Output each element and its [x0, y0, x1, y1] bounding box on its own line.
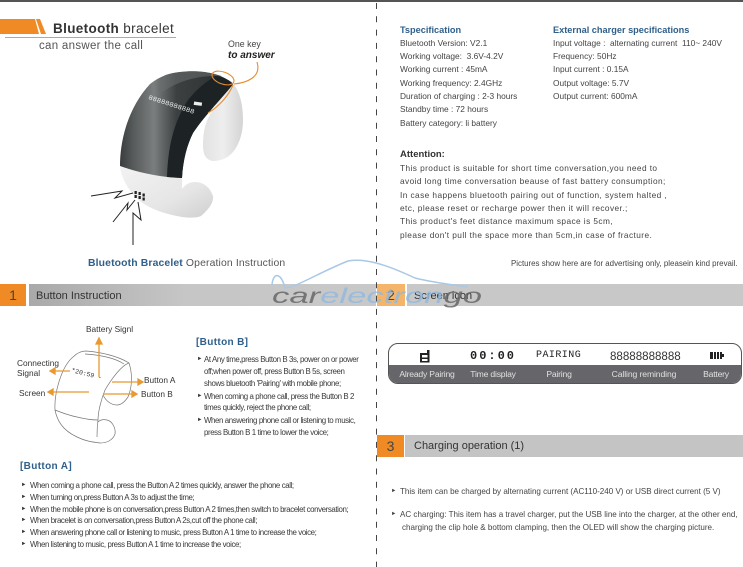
bar title: Screen icon	[414, 290, 472, 302]
heading underline	[5, 37, 176, 38]
label: battery sign: Battery Signl	[86, 324, 133, 334]
charging instructions: AC charging: This item has a travel charger, put the USB line into the charger, at the other end,	[400, 510, 738, 519]
attention heading: Attention:	[400, 149, 445, 160]
label: screen: Screen	[19, 388, 45, 398]
bar	[29, 284, 376, 306]
speaker dots	[134, 191, 145, 200]
calling digits: 88888888888	[610, 350, 681, 363]
number 1	[0, 284, 26, 306]
charger lines: Input voltage : alternating current 110~ 240V	[553, 38, 722, 48]
section bar 3	[377, 435, 743, 457]
callout: one key to answer: to answer	[228, 50, 275, 61]
button b instructions: shows bluetooth 'Pairing' with mobile phone;	[204, 379, 341, 388]
label: connecting signal: Connecting	[17, 358, 59, 368]
illustration: bracelet	[90, 62, 258, 245]
top rule	[0, 0, 743, 2]
rear band	[203, 81, 243, 161]
bar title: Charging operation (1)	[414, 440, 524, 452]
specification panel: Working voltage: 3.6V-4.2V	[400, 51, 503, 61]
button b instructions: ►	[197, 417, 202, 423]
button a instructions	[20, 461, 348, 549]
bracelet outline	[55, 351, 132, 443]
lower white band	[120, 167, 213, 218]
screen icon strip: Battery	[703, 369, 729, 379]
button b instructions: At Any time,press Button B 3s, power on or power	[204, 355, 358, 364]
button b instructions: When coming a phone call, press the Button B 2	[204, 392, 354, 401]
button b heading: [Button B]	[196, 337, 248, 348]
button a instructions: When coming a phone call, press the Button A 2 times quickly, answer the phone call;	[30, 481, 294, 490]
charging line 3: charging the clip hole & bottom clamping, then the OLED will show the charging picture.	[402, 523, 714, 532]
watermark	[271, 260, 483, 308]
watermark text: car electron go	[272, 285, 483, 308]
orange arrows	[48, 338, 143, 397]
specification panel: Battery category: li battery	[400, 118, 497, 128]
bar	[407, 284, 743, 306]
attention block: please don't pull the space more than 5cm,in case of fracture.	[400, 230, 652, 240]
orange tab	[0, 19, 46, 34]
button b instructions: press Button B 1 time to lower the voice;	[204, 428, 328, 437]
spec lines: Bluetooth Version: V2.1	[400, 38, 487, 48]
button a instructions: ►	[21, 529, 26, 535]
button b instructions: ►	[197, 393, 202, 399]
specification panel	[400, 25, 517, 128]
screen icon strip: Pairing	[546, 369, 572, 379]
number 3	[377, 435, 404, 457]
specification panel: Duration of charging : 2-3 hours	[400, 91, 517, 101]
attention text: This product is suitable for short time conversation,you need to	[400, 163, 657, 173]
button b instructions: When answering phone call or listening to music,	[204, 416, 355, 425]
strip labels: Already Pairing	[399, 369, 455, 379]
icon: battery	[710, 352, 724, 359]
heading text: Bluetooth bracelet	[53, 21, 174, 36]
subheading: can answer the call	[39, 40, 143, 52]
attention block: avoid long time conversation beause of fast battery consumption;	[400, 176, 666, 186]
button a instructions: ►	[21, 506, 26, 512]
icon: paired phone	[420, 350, 430, 362]
specification panel: Standby time : 72 hours	[400, 104, 488, 114]
external charger panel: Output voltage: 5.7V	[553, 78, 629, 88]
section bar 2	[377, 284, 743, 306]
charging instructions	[391, 487, 738, 532]
charger heading: External charger specifications	[553, 25, 689, 35]
button b instructions	[196, 337, 359, 437]
button b instructions: off;when power off, press Button B 5s, screen	[204, 367, 344, 376]
number 2	[377, 284, 405, 306]
button a instructions: When bracelet is on conversation,press Button A 2s,cut off the phone call;	[30, 516, 257, 525]
button a instructions: ►	[21, 541, 26, 547]
advertising note: Pictures show here are for advertising only, pleasein kind prevail.	[511, 259, 738, 268]
label: button a: Button A	[144, 375, 175, 385]
screen digits: *20:59 -	[71, 367, 103, 381]
button a list: ►	[21, 482, 26, 488]
sound zigzags	[91, 191, 141, 245]
bar title: Button Instruction	[36, 290, 122, 302]
button a instructions: When the mobile phone is on conversation,press Button A 2 times,then switch to bracelet conversation;	[30, 505, 348, 514]
top gloss	[158, 71, 222, 94]
watermark swoosh	[272, 260, 468, 288]
battery glyph	[194, 101, 202, 106]
screen icon strip: Time display	[470, 369, 516, 379]
external charger panel: Frequency: 50Hz	[553, 51, 617, 61]
button b instructions: times quickly, reject the phone call;	[204, 403, 311, 412]
number 2: 2	[387, 287, 395, 303]
charging instructions: This item can be charged by alternating current (AC110-240 V) or USB direct current (5 V)	[400, 487, 721, 496]
button a instructions: When answering phone call or listening to music, press Button A 1 time to increase the voice;	[30, 528, 316, 537]
callout: one key to answer	[228, 39, 276, 61]
charging line 2: ►	[391, 511, 396, 517]
attention block: In case happens bluetooth pairing out of function, system halted ,	[400, 190, 667, 200]
label: connecting signal: Signal	[17, 368, 40, 378]
orange callout ring and leader	[208, 62, 258, 113]
charging line 1: ►	[391, 488, 396, 494]
pairing display: PAIRING	[536, 350, 581, 361]
label: connecting signal	[17, 358, 59, 378]
button b list: ►	[197, 356, 202, 362]
external charger panel	[553, 25, 722, 101]
callout: one key to answer: One key	[228, 39, 261, 49]
specification panel: Working current : 45mA	[400, 64, 488, 74]
number 3: 3	[387, 438, 394, 454]
screen icon strip	[388, 343, 742, 384]
bar	[405, 435, 743, 457]
button a instructions: ►	[21, 494, 26, 500]
screen icon strip: Calling reminding	[612, 369, 676, 379]
external charger panel: Input current : 0.15A	[553, 64, 629, 74]
attention block: This product's feet distance maximum space is 5cm,	[400, 216, 613, 226]
black screen region	[167, 76, 233, 178]
button a heading: [Button A]	[20, 461, 72, 472]
attention block	[400, 149, 667, 240]
number 1: 1	[9, 287, 17, 303]
attention block: etc, please reset or recharge power then it will recover.;	[400, 203, 628, 213]
button a instructions: ►	[21, 517, 26, 523]
section bar 1	[0, 284, 376, 306]
button a instructions: When turning on,press Button A 3s to adjust the time;	[30, 493, 194, 502]
spec heading: Tspecification	[400, 25, 461, 35]
section title: operation instruction: Bluetooth Bracelet Operation Instruction	[88, 258, 285, 269]
external charger panel: Output current: 600mA	[553, 91, 637, 101]
button a instructions: When listening to music, press Button A 1 time to increase the voice;	[30, 540, 241, 549]
label: button b: Button B	[141, 389, 173, 399]
grey label band	[389, 365, 743, 385]
product heading	[0, 19, 176, 52]
dark screen band	[120, 71, 233, 178]
diagram: button locations	[17, 324, 176, 444]
time display: 00:00	[470, 349, 516, 363]
specification panel: Working frequency: 2.4GHz	[400, 78, 502, 88]
screen digits: 88888888888	[147, 94, 195, 116]
